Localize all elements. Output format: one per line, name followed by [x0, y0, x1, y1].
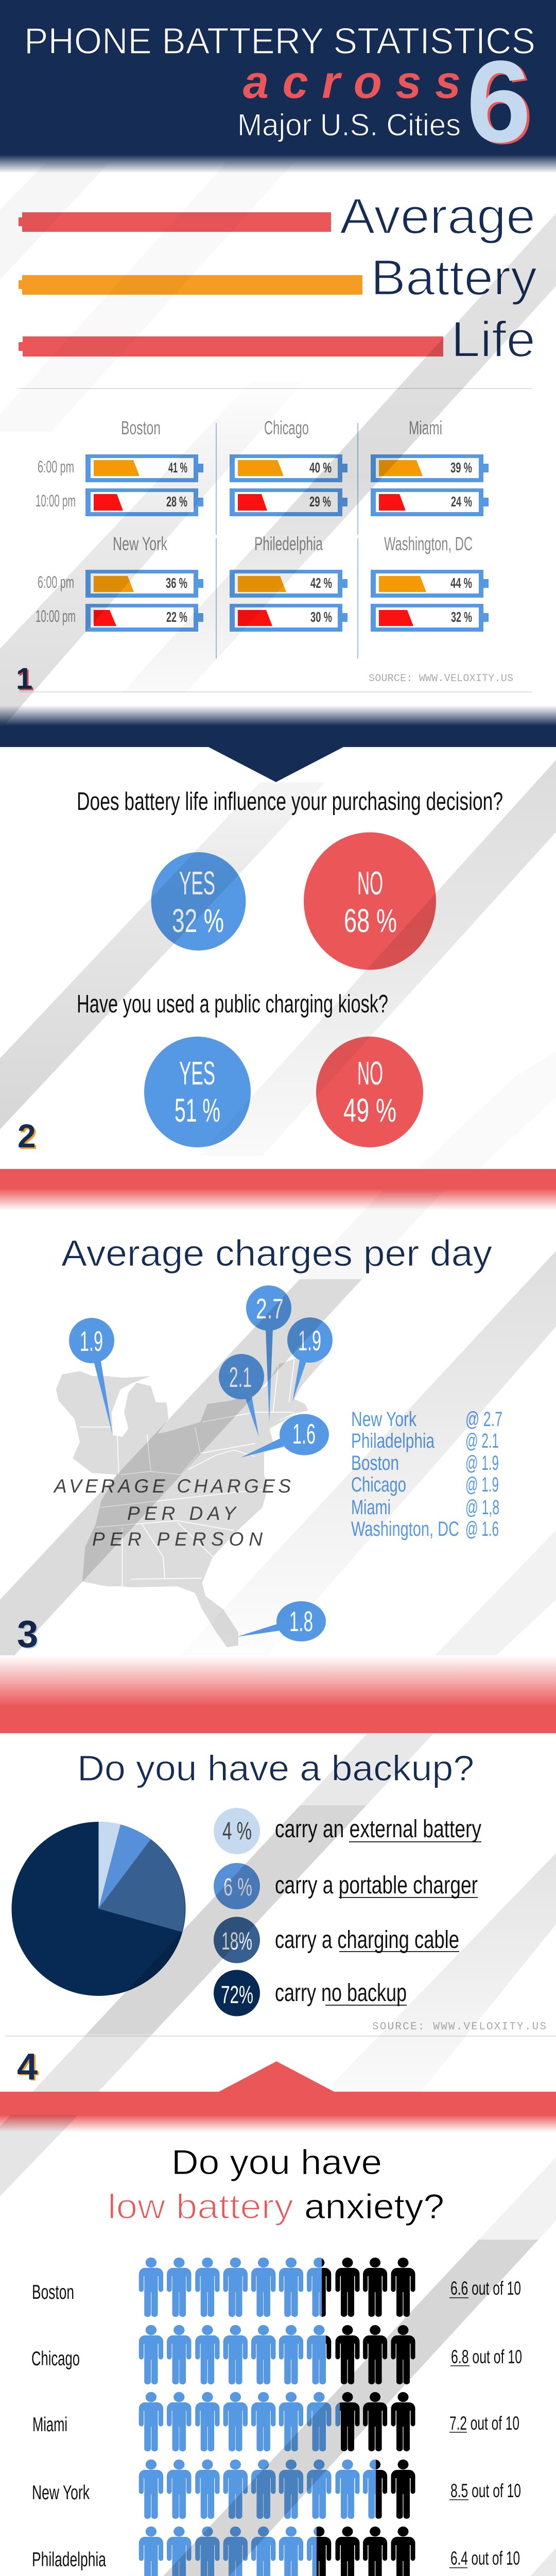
- section number 2: 2: [19, 1119, 38, 1156]
- yes 51 percent circle: YES: [179, 1055, 215, 1092]
- row: New York 8.5: New York: [32, 2482, 90, 2504]
- source note 4: SOURCE: WWW.VELOXITY.US: [372, 2021, 546, 2033]
- decorative title battery bar 1: [19, 212, 331, 232]
- legend: 4 percent external battery: 4 %: [222, 1818, 252, 1845]
- city ranking list: @ 2.7: [465, 1408, 502, 1431]
- city block: Boston: 28 %: [166, 494, 187, 510]
- city block: Philadelphia: Philedelphia: [254, 533, 323, 554]
- heading: do you have low battery anxiety: [108, 2143, 444, 2226]
- yes 51 percent circle: 51 %: [175, 1092, 220, 1129]
- row: Chicago 6.8: 6.8 out of 10: [451, 2346, 522, 2367]
- city block: Washington, DC: 32 %: [451, 609, 472, 625]
- no 68 percent circle: [304, 833, 436, 970]
- question 2: Have you used a public charging kiosk?: [77, 990, 388, 1018]
- city ranking list: @ 1,8: [465, 1496, 499, 1519]
- title line: major U.S. cities: Major U.S. Cities: [237, 108, 461, 142]
- row: New York 8.5: [32, 2460, 521, 2519]
- row: Boston 6.6: 6.6 out of 10: [450, 2278, 521, 2299]
- city ranking list: @ 1.9: [465, 1473, 499, 1496]
- city block: Washington, DC: 44 %: [450, 575, 472, 591]
- source note 1: SOURCE: WWW.VELOXITY.US: [369, 673, 513, 685]
- title numeral: 6: 6: [466, 36, 531, 166]
- row: Miami 7.2: [32, 2392, 519, 2451]
- city block: Chicago: 40 %: [309, 460, 332, 476]
- yes 32 percent circle: YES: [179, 865, 215, 902]
- navy divider band with downward arrow: [0, 705, 556, 782]
- row: New York 8.5: 8.5 out of 10: [450, 2480, 521, 2501]
- city block: New York: 36 %: [166, 575, 187, 591]
- row: Boston 6.6: [32, 2258, 521, 2317]
- city block: Washington, DC: [371, 533, 489, 632]
- legend: 72 percent no backup: [214, 1970, 407, 2016]
- city block: Miami: [371, 417, 489, 516]
- row: Philadelphia 6.4: [32, 2527, 520, 2576]
- legend: 18 percent charging cable: carry a charging cable: [275, 1926, 459, 1954]
- row: Boston 6.6: Boston: [32, 2281, 74, 2303]
- city block: New York: [85, 533, 203, 632]
- legend: 18 percent charging cable: [214, 1917, 459, 1963]
- section number 3: 3: [18, 1614, 39, 1656]
- map pin: Boston 1.9: 1.9: [298, 1325, 321, 1357]
- city block: Washington, DC: Washington, DC: [384, 533, 473, 554]
- no 49 percent circle: 49 %: [343, 1092, 396, 1129]
- city ranking list: Washington, DC: [351, 1518, 459, 1540]
- header panel: [0, 0, 556, 173]
- map pin: Washington, DC 1.6: 1.6: [292, 1418, 316, 1450]
- time labels: 10:00 pm: [36, 492, 76, 510]
- heading: average battery life: [340, 188, 537, 367]
- decorative title battery bar 3: [19, 336, 443, 357]
- no 49 percent circle: [316, 1037, 423, 1147]
- pie chart: backup types: [11, 1822, 185, 1996]
- no 68 percent circle: 68 %: [344, 902, 397, 939]
- title numeral: 6: 6: [469, 38, 534, 168]
- city block: Boston: [85, 417, 203, 516]
- city block: Miami: 39 %: [450, 460, 472, 476]
- map pin: Boston 1.9: [287, 1317, 333, 1402]
- map: eastern United States: [56, 1357, 324, 1647]
- legend: 6 percent portable charger: 6 %: [223, 1874, 252, 1901]
- section number 3: 3: [17, 1613, 38, 1655]
- heading: do you have low battery anxiety: Do you have: [171, 2143, 382, 2182]
- city block: Chicago: Chicago: [264, 417, 309, 438]
- no 68 percent circle: NO: [357, 865, 383, 902]
- map pin: New York 2.7: [246, 1285, 291, 1422]
- map pin: Miami 1.8: [237, 1601, 326, 1641]
- legend: 6 percent portable charger: carry a portable charger: [275, 1872, 478, 1899]
- yes 32 percent circle: 32 %: [172, 902, 224, 939]
- map pin: Miami 1.8: 1.8: [289, 1605, 313, 1637]
- legend: 4 percent external battery: [214, 1808, 481, 1854]
- city block: Philadelphia: 30 %: [310, 609, 332, 625]
- red divider band 2 to 3: [0, 1169, 556, 1210]
- title word: across: across: [243, 57, 461, 108]
- row: Chicago 6.8: [31, 2325, 522, 2384]
- map pin: Philadelphia 2.1: [219, 1354, 264, 1437]
- title line: phone battery statistics: PHONE BATTERY STATISTICS: [24, 21, 535, 62]
- map caption: PER DAY: [127, 1503, 237, 1524]
- legend: 6 percent portable charger: [214, 1863, 478, 1909]
- yes 51 percent circle: [144, 1037, 251, 1147]
- heading: average charges per day: Average charges per day: [61, 1233, 493, 1274]
- city ranking list: Philadelphia: [351, 1430, 435, 1452]
- no 49 percent circle: NO: [357, 1055, 383, 1092]
- section number 2: 2: [18, 1117, 36, 1155]
- city block: Miami: 24 %: [451, 494, 472, 510]
- panel 2: purchasing and kiosk questions: [18, 788, 503, 1156]
- time labels: 6:00 pm: [38, 457, 74, 476]
- heading: average battery life: Battery: [371, 249, 537, 306]
- section number 1: 1: [18, 664, 34, 697]
- city block: Philadelphia: 42 %: [310, 575, 332, 591]
- panel 5: low battery anxiety: [16, 2143, 522, 2576]
- legend: 4 percent external battery: carry an external battery: [275, 1816, 481, 1843]
- time labels: 10:00 pm: [36, 607, 76, 625]
- panel 1: average battery life: [16, 188, 537, 697]
- map caption: [53, 1476, 291, 1550]
- city ranking list: [351, 1408, 502, 1540]
- yes 32 percent circle: [151, 852, 246, 951]
- map caption: PER PERSON: [92, 1529, 263, 1550]
- heading: average battery life: Average: [340, 188, 535, 244]
- row: Philadelphia 6.4: 6.4 out of 10: [450, 2548, 520, 2569]
- decorative title battery bar 2: [19, 275, 362, 295]
- map caption: AVERAGE CHARGES: [53, 1476, 291, 1497]
- red divider band 4 to 5 with upward arrow: [0, 2061, 556, 2132]
- heading: do you have low battery anxiety: anxiety?: [304, 2187, 444, 2226]
- map pin: Philadelphia 2.1: 2.1: [229, 1361, 252, 1393]
- time labels: [36, 457, 76, 625]
- city block: Chicago: [230, 417, 348, 516]
- city ranking list: Boston: [351, 1452, 399, 1475]
- row: Miami 7.2: Miami: [32, 2414, 67, 2436]
- map pin: Chicago 1.9: 1.9: [80, 1325, 103, 1357]
- map pin: Chicago 1.9: [69, 1318, 114, 1435]
- city block: Philadelphia: [230, 533, 348, 632]
- city block: New York: New York: [113, 533, 167, 554]
- city ranking list: New York: [351, 1408, 417, 1431]
- city ranking list: @ 2.1: [465, 1430, 499, 1452]
- section number 1: 1: [16, 662, 32, 696]
- row: Chicago 6.8: Chicago: [31, 2348, 80, 2370]
- panel 4: do you have a backup: [5, 1748, 556, 2089]
- city block: Boston: Boston: [121, 417, 161, 438]
- section number 4: 4: [19, 2047, 39, 2089]
- city ranking list: Chicago: [351, 1473, 406, 1496]
- city ranking list: @ 1.6: [465, 1518, 499, 1540]
- city block: Boston: 41 %: [168, 460, 187, 476]
- city ranking list: Miami: [351, 1496, 391, 1519]
- section number 4: 4: [17, 2046, 38, 2088]
- city block: New York: 22 %: [166, 609, 187, 625]
- red divider band 3 to 4: [0, 1655, 556, 1733]
- city block: Chicago: 29 %: [309, 494, 331, 510]
- row: Philadelphia 6.4: Philadelphia: [32, 2549, 106, 2571]
- legend: 72 percent no backup: 72%: [221, 1981, 253, 2009]
- legend: 72 percent no backup: carry no backup: [275, 1979, 407, 2007]
- legend: 18 percent charging cable: 18%: [221, 1928, 252, 1955]
- city ranking list: @ 1.9: [465, 1452, 499, 1475]
- heading: do you have low battery anxiety: low battery: [108, 2187, 293, 2226]
- map pin: New York 2.7: 2.7: [256, 1293, 284, 1325]
- heading: average battery life: Life: [451, 311, 535, 367]
- panel 3: average charges per day: [17, 1233, 502, 1656]
- row: Miami 7.2: 7.2 out of 10: [449, 2413, 519, 2434]
- heading: do you have a backup: Do you have a backup?: [77, 1748, 474, 1788]
- city block: Miami: Miami: [409, 417, 442, 438]
- time labels: 6:00 pm: [38, 573, 74, 591]
- map pin: Washington, DC 1.6: [241, 1414, 329, 1458]
